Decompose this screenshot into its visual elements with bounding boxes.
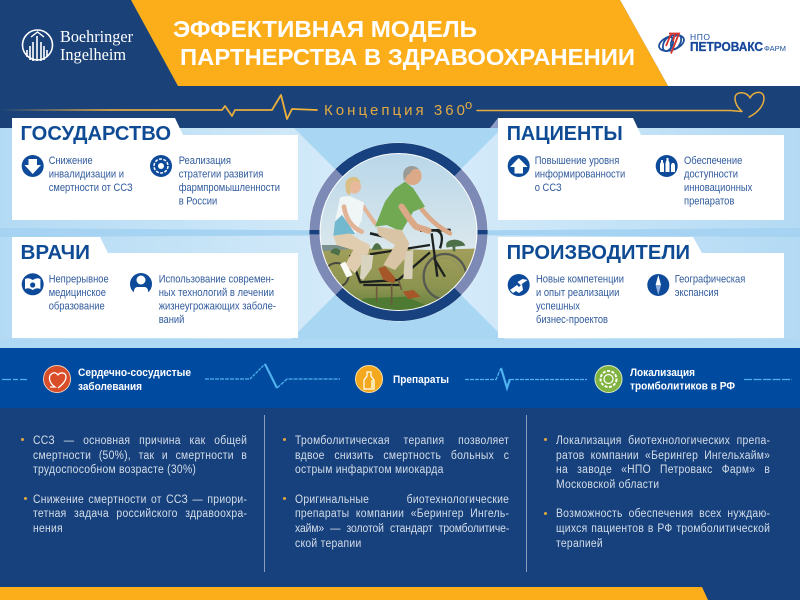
text column 3: терапией <box>556 538 603 550</box>
panel: Врачи: образование <box>49 300 105 312</box>
panel: Государство: ГОСУДАРСТВО <box>20 123 171 145</box>
bullet <box>21 438 24 441</box>
panel: Производители <box>498 237 784 338</box>
panel: Производители: экспансия <box>675 287 719 299</box>
topic: cardiovascular diseases <box>44 366 191 393</box>
logo: Boehringer Ingelheim <box>22 27 133 64</box>
panel: Врачи: Использование современ- <box>159 274 274 286</box>
text column 1: трудоспособном возрасте (30%) <box>33 464 196 476</box>
panel: Производители: и опыт реализации <box>536 287 619 299</box>
panel: Производители: Географическая <box>675 274 745 286</box>
panel: Пациенты: информированности <box>535 168 625 180</box>
topic: thrombolytics localisation <box>595 366 735 392</box>
icon: handshake <box>508 274 530 296</box>
text column 2: ской терапии <box>295 538 362 550</box>
panel: Врачи: ВРАЧИ <box>20 242 90 264</box>
lower navy section <box>0 408 800 600</box>
text column 1: Снижение смертности от ССЗ — приори- <box>33 494 247 506</box>
panel: Врачи: ваний <box>159 314 184 326</box>
text column 3: Локализация биотехнологических препа- <box>556 435 770 447</box>
topic: cardiovascular diseases: Сердечно-сосудистые <box>78 367 191 379</box>
panel: Государство: стратегии развития <box>179 168 263 180</box>
panel: Врачи: жизнеугрожающих заболе- <box>159 300 276 312</box>
panel: Производители: успешных <box>536 300 580 312</box>
bottom yellow strip <box>0 587 708 600</box>
panel: Пациенты: ПАЦИЕНТЫ <box>507 123 623 145</box>
topic: drugs: Препараты <box>393 374 449 386</box>
icon: compass <box>647 274 669 296</box>
text column 3: ратов компании «Берингер Ингельхайм» <box>556 450 770 462</box>
bullet <box>283 497 286 500</box>
panel: Пациенты: Повышение уровня <box>535 155 619 167</box>
text column 2 <box>295 435 509 550</box>
concept heading: o <box>465 97 472 112</box>
logo: NPO Petrovax Pharm <box>657 32 786 54</box>
icon: down arrow <box>22 155 44 177</box>
text column 1: смертности (50%), так и смертности в <box>33 450 247 462</box>
man <box>375 166 450 299</box>
panel: Государство: Реализация <box>179 155 231 167</box>
icon: gear <box>150 155 172 177</box>
topic: thrombolytics localisation: тромболитиков в РФ <box>630 380 735 392</box>
logo: NPO Petrovax Pharm: ФАРМ <box>764 44 786 53</box>
panel: Производители: бизнес-проектов <box>536 314 608 326</box>
woman <box>333 177 375 280</box>
panel: Государство: смертности от ССЗ <box>49 182 133 194</box>
panel: Пациенты: инновационных <box>684 182 753 194</box>
text column 3: на заводе «НПО Петровакс Фарм» в <box>556 464 770 476</box>
panel: Государство: в России <box>179 196 217 208</box>
light blue backdrop with rays <box>0 128 800 348</box>
icon: vials <box>656 155 678 177</box>
text column 2: вдвое снизить смертность больных с <box>295 450 509 462</box>
text column 2: Оригинальные биотехнологические <box>295 494 509 506</box>
header background <box>0 0 800 128</box>
text column 1: ССЗ — основная причина как общей <box>33 435 247 447</box>
ecg line with heart <box>0 92 764 119</box>
panel: Пациенты: доступности <box>684 168 738 180</box>
bullet <box>544 438 547 441</box>
bullet <box>283 438 286 441</box>
icon: up arrow <box>508 155 530 177</box>
panel: Пациенты: Обеспечение <box>684 155 742 167</box>
title banner <box>131 0 668 86</box>
logo: NPO Petrovax Pharm: ПЕТРОВАКС <box>690 40 763 54</box>
panel: Государство: Снижение <box>49 155 93 167</box>
panel: Государство: фармпромышленности <box>179 182 280 194</box>
text column 2: хайм» — золотой стандарт тромболитиче- <box>295 523 509 535</box>
icon: medical book <box>22 273 44 295</box>
panel: Пациенты: препаратов <box>684 196 734 208</box>
title banner: ПАРТНЕРСТВА В ЗДРАВООХРАНЕНИИ <box>180 44 635 70</box>
text column 2: Тромболитическая терапия позволяет <box>295 435 509 447</box>
text column 3: Возможность обеспечения всех нуждаю- <box>556 508 770 520</box>
panel: Пациенты: о ССЗ <box>535 182 562 194</box>
text column 2: препараты компании «Берингер Ингель- <box>295 508 509 520</box>
pulse lines <box>2 364 792 388</box>
panel: Врачи: ных технологий в лечении <box>159 287 274 299</box>
panel: Государство: инвалидизации и <box>49 168 124 180</box>
title banner: ЭФФЕКТИВНАЯ МОДЕЛЬ <box>173 16 477 42</box>
bullet <box>544 512 547 515</box>
panel: Врачи: медицинское <box>49 287 106 299</box>
bullet <box>24 497 27 500</box>
panel: Врачи <box>12 237 298 338</box>
concept heading: Концепция 360 <box>324 102 465 119</box>
text column 1: нения <box>33 523 63 535</box>
photo: seniors on a tandem bicycle <box>309 143 488 321</box>
topic: thrombolytics localisation: Локализация <box>630 367 695 379</box>
text column 2: острым инфарктом миокарда <box>295 464 444 476</box>
text column 3: щихся пациентов в РФ тромболитической <box>556 523 770 535</box>
text column 3: Московской области <box>556 479 659 491</box>
topic: cardiovascular diseases: заболевания <box>78 381 142 393</box>
panel: Пациенты <box>490 118 784 220</box>
bicycle <box>325 230 466 305</box>
text column 1: тетная задача российского здравоохра- <box>33 508 247 520</box>
panel: Врачи: Непрерывное <box>49 274 109 286</box>
panel: Государство <box>12 118 298 220</box>
logo: Boehringer Ingelheim: Ingelheim <box>60 45 126 64</box>
icon: doctor <box>130 273 152 295</box>
text column 3 <box>556 435 770 550</box>
panel: Производители: Новые компетенции <box>536 274 624 286</box>
panel: Производители: ПРОИЗВОДИТЕЛИ <box>507 242 690 264</box>
blue band <box>0 348 800 408</box>
logo: NPO Petrovax Pharm: НПО <box>690 32 710 42</box>
logo: Boehringer Ingelheim: Boehringer <box>60 27 133 46</box>
topic: drugs <box>356 366 449 392</box>
text column 1 <box>33 435 247 535</box>
